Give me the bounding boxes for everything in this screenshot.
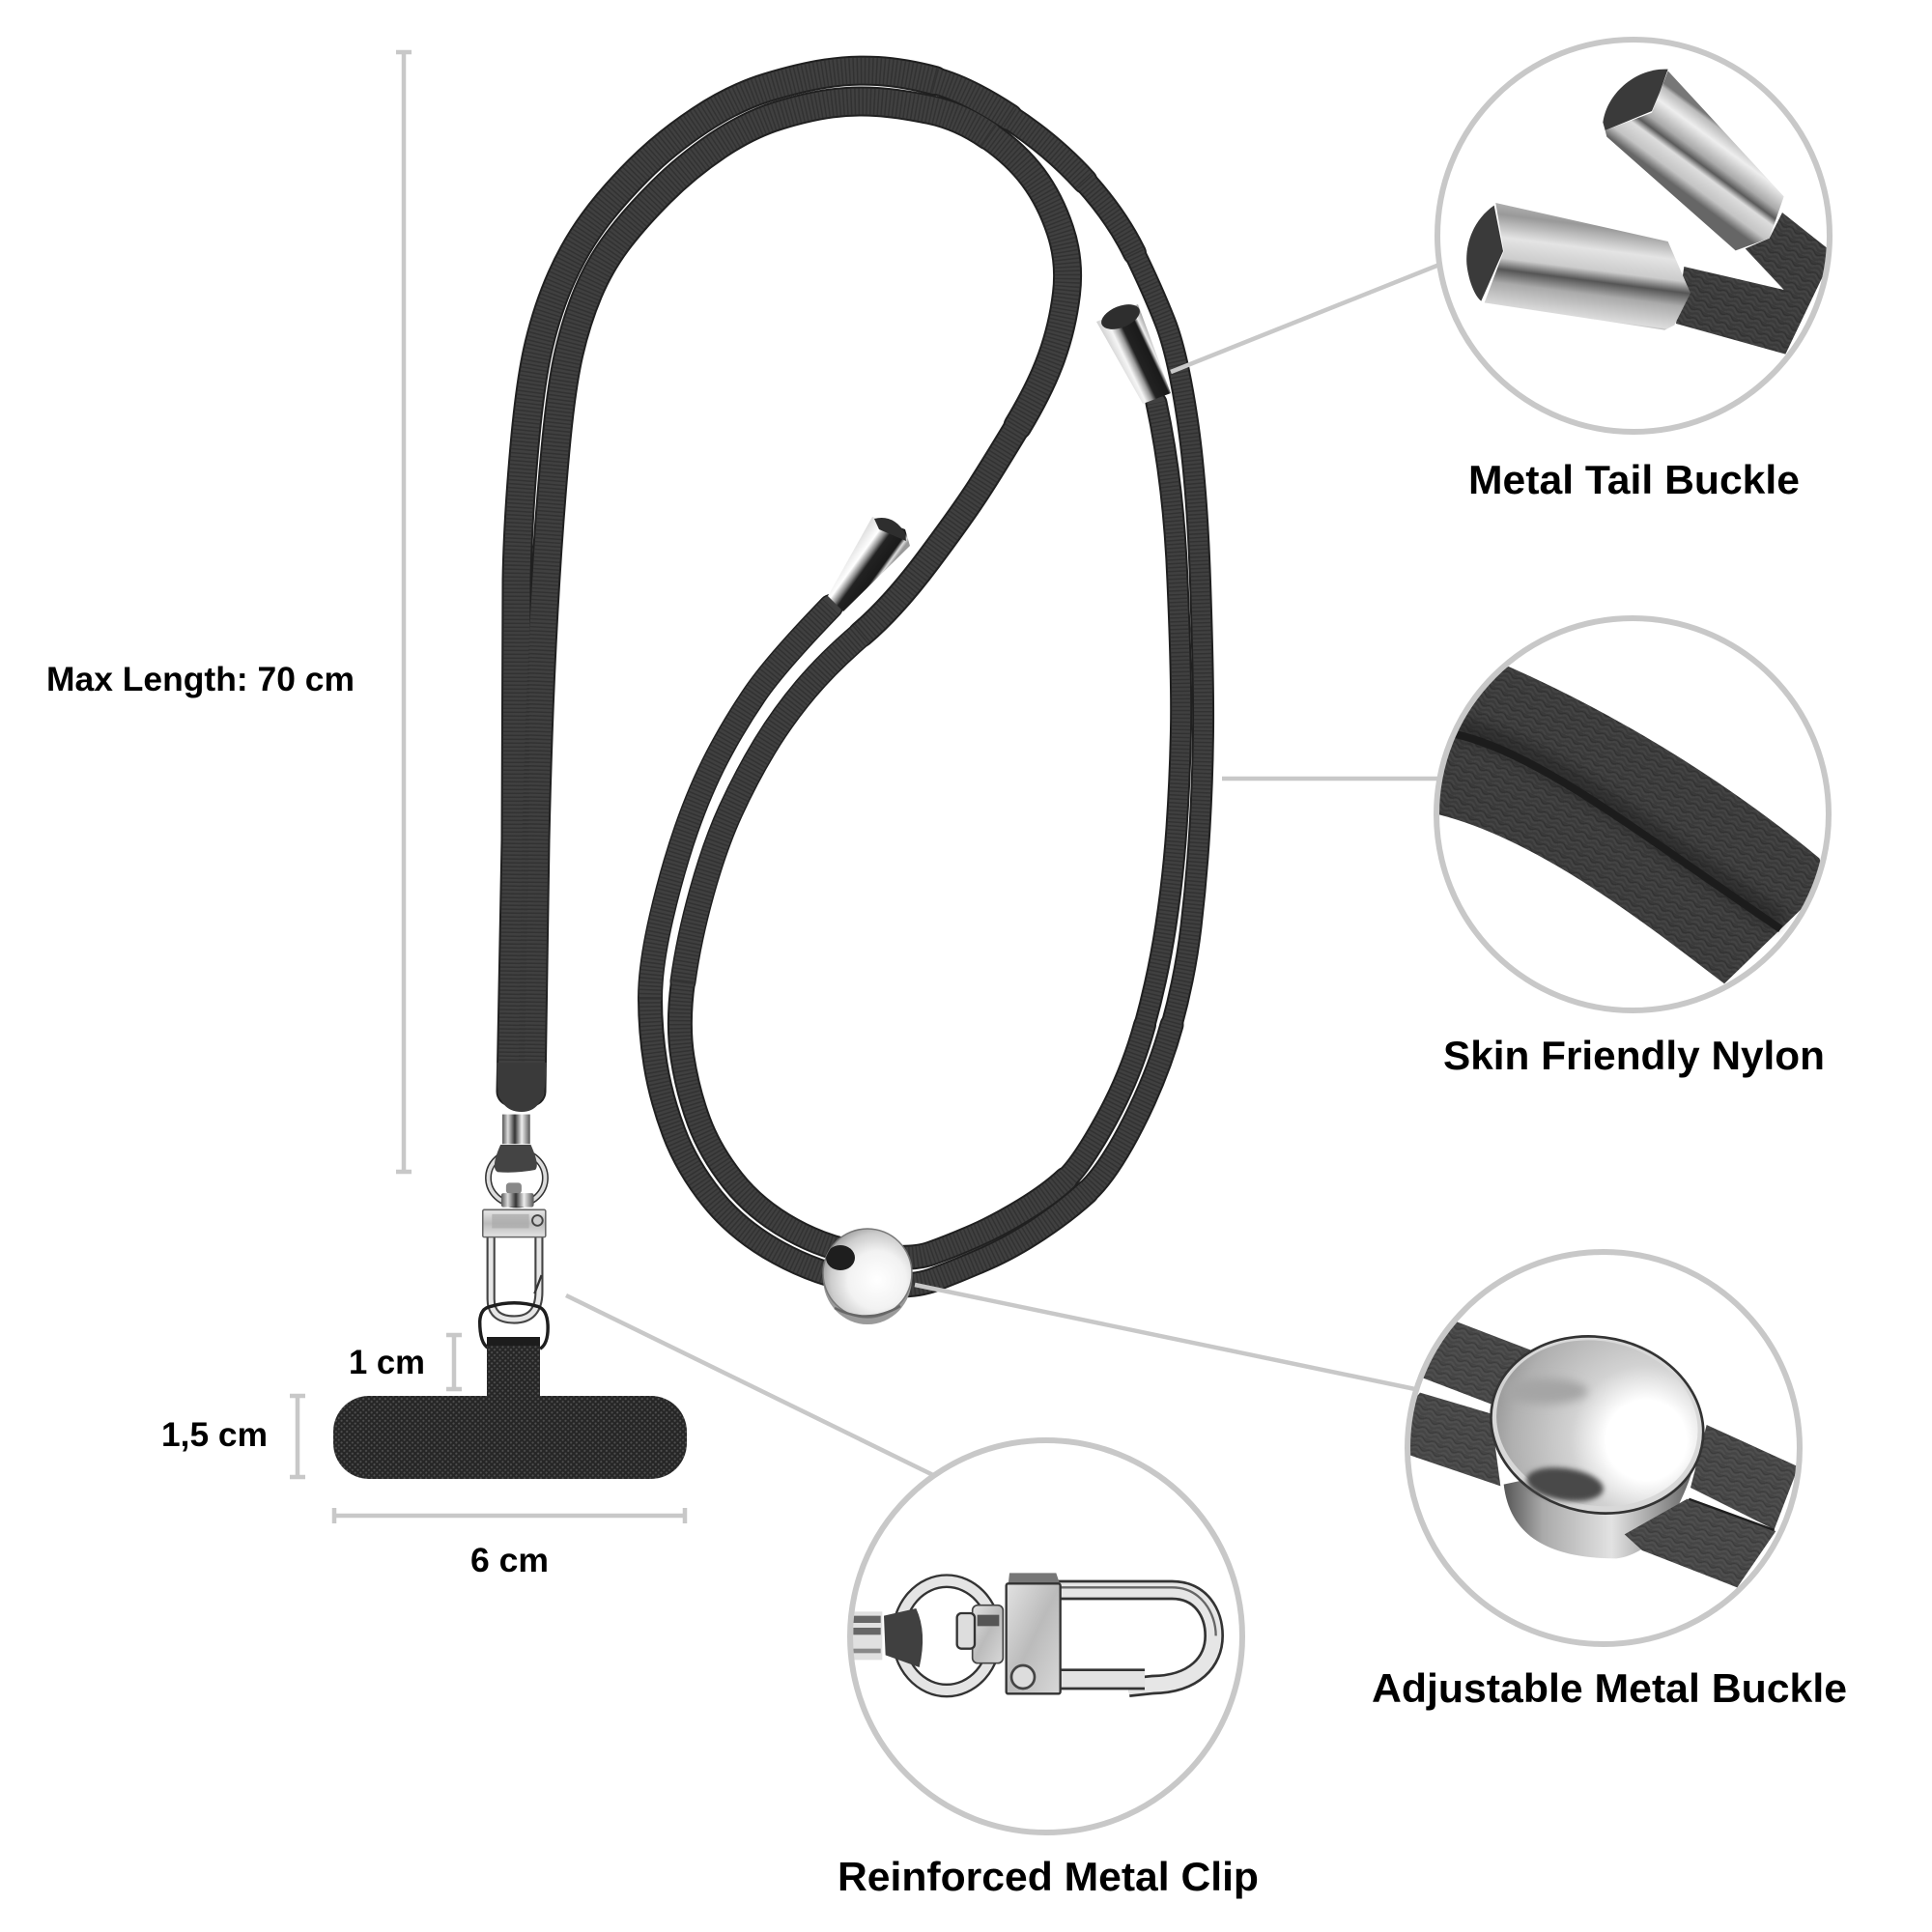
clip block bbox=[483, 1209, 546, 1237]
detail: clip bbox=[850, 1573, 1216, 1693]
swivel clip hardware bbox=[480, 1115, 548, 1349]
dimension: strap 1 cm bbox=[446, 1335, 462, 1389]
cord tab bbox=[495, 1145, 537, 1173]
panel: metal tail buckle bbox=[1437, 40, 1830, 432]
label: 1,5 cm: 1,5 cm bbox=[161, 1416, 268, 1454]
heading: skin friendly nylon: Skin Friendly Nylon bbox=[1443, 1033, 1825, 1078]
label: 1 cm: 1 cm bbox=[349, 1344, 425, 1381]
leader line: adjustable buckle bbox=[915, 1285, 1415, 1389]
label: 6 cm: 6 cm bbox=[470, 1542, 549, 1579]
detail: buckle bbox=[1401, 1317, 1799, 1587]
heading: adjustable metal buckle: Adjustable Metal Buckle bbox=[1372, 1665, 1847, 1711]
metal tail buckle (rope, lower) bbox=[828, 517, 910, 611]
detail: tail buckles bbox=[1466, 70, 1829, 355]
swivel neck bbox=[501, 1182, 534, 1208]
rope collar bbox=[502, 1115, 530, 1144]
dimension: patch width bbox=[334, 1508, 685, 1523]
panel: skin friendly nylon bbox=[1427, 618, 1829, 1010]
dimension: patch height bbox=[290, 1396, 305, 1477]
phone patch bbox=[333, 1396, 687, 1479]
leader line: nylon bbox=[1222, 777, 1437, 781]
lanyard rope bbox=[511, 71, 1204, 1286]
rope strap end bbox=[497, 1063, 547, 1112]
adjustable buckle on rope bbox=[823, 1229, 912, 1324]
leader line: metal clip bbox=[566, 1295, 933, 1475]
swivel ring bbox=[488, 1151, 545, 1205]
label: max length: Max Length: 70 cm bbox=[46, 661, 355, 698]
D-ring bbox=[480, 1303, 548, 1349]
metal tail buckle (rope, upper) bbox=[1096, 299, 1171, 404]
heading: metal tail buckle: Metal Tail Buckle bbox=[1468, 457, 1800, 502]
clip arms bbox=[491, 1236, 542, 1320]
leader line: metal tail buckle bbox=[1171, 265, 1439, 372]
patch strap bbox=[487, 1337, 540, 1399]
panel: adjustable metal buckle bbox=[1401, 1252, 1800, 1644]
panel: reinforced metal clip bbox=[850, 1440, 1242, 1833]
detail: nylon weave bbox=[1427, 667, 1829, 983]
dimension: max length bbox=[396, 52, 412, 1172]
heading: reinforced metal clip: Reinforced Metal Clip bbox=[838, 1854, 1259, 1899]
